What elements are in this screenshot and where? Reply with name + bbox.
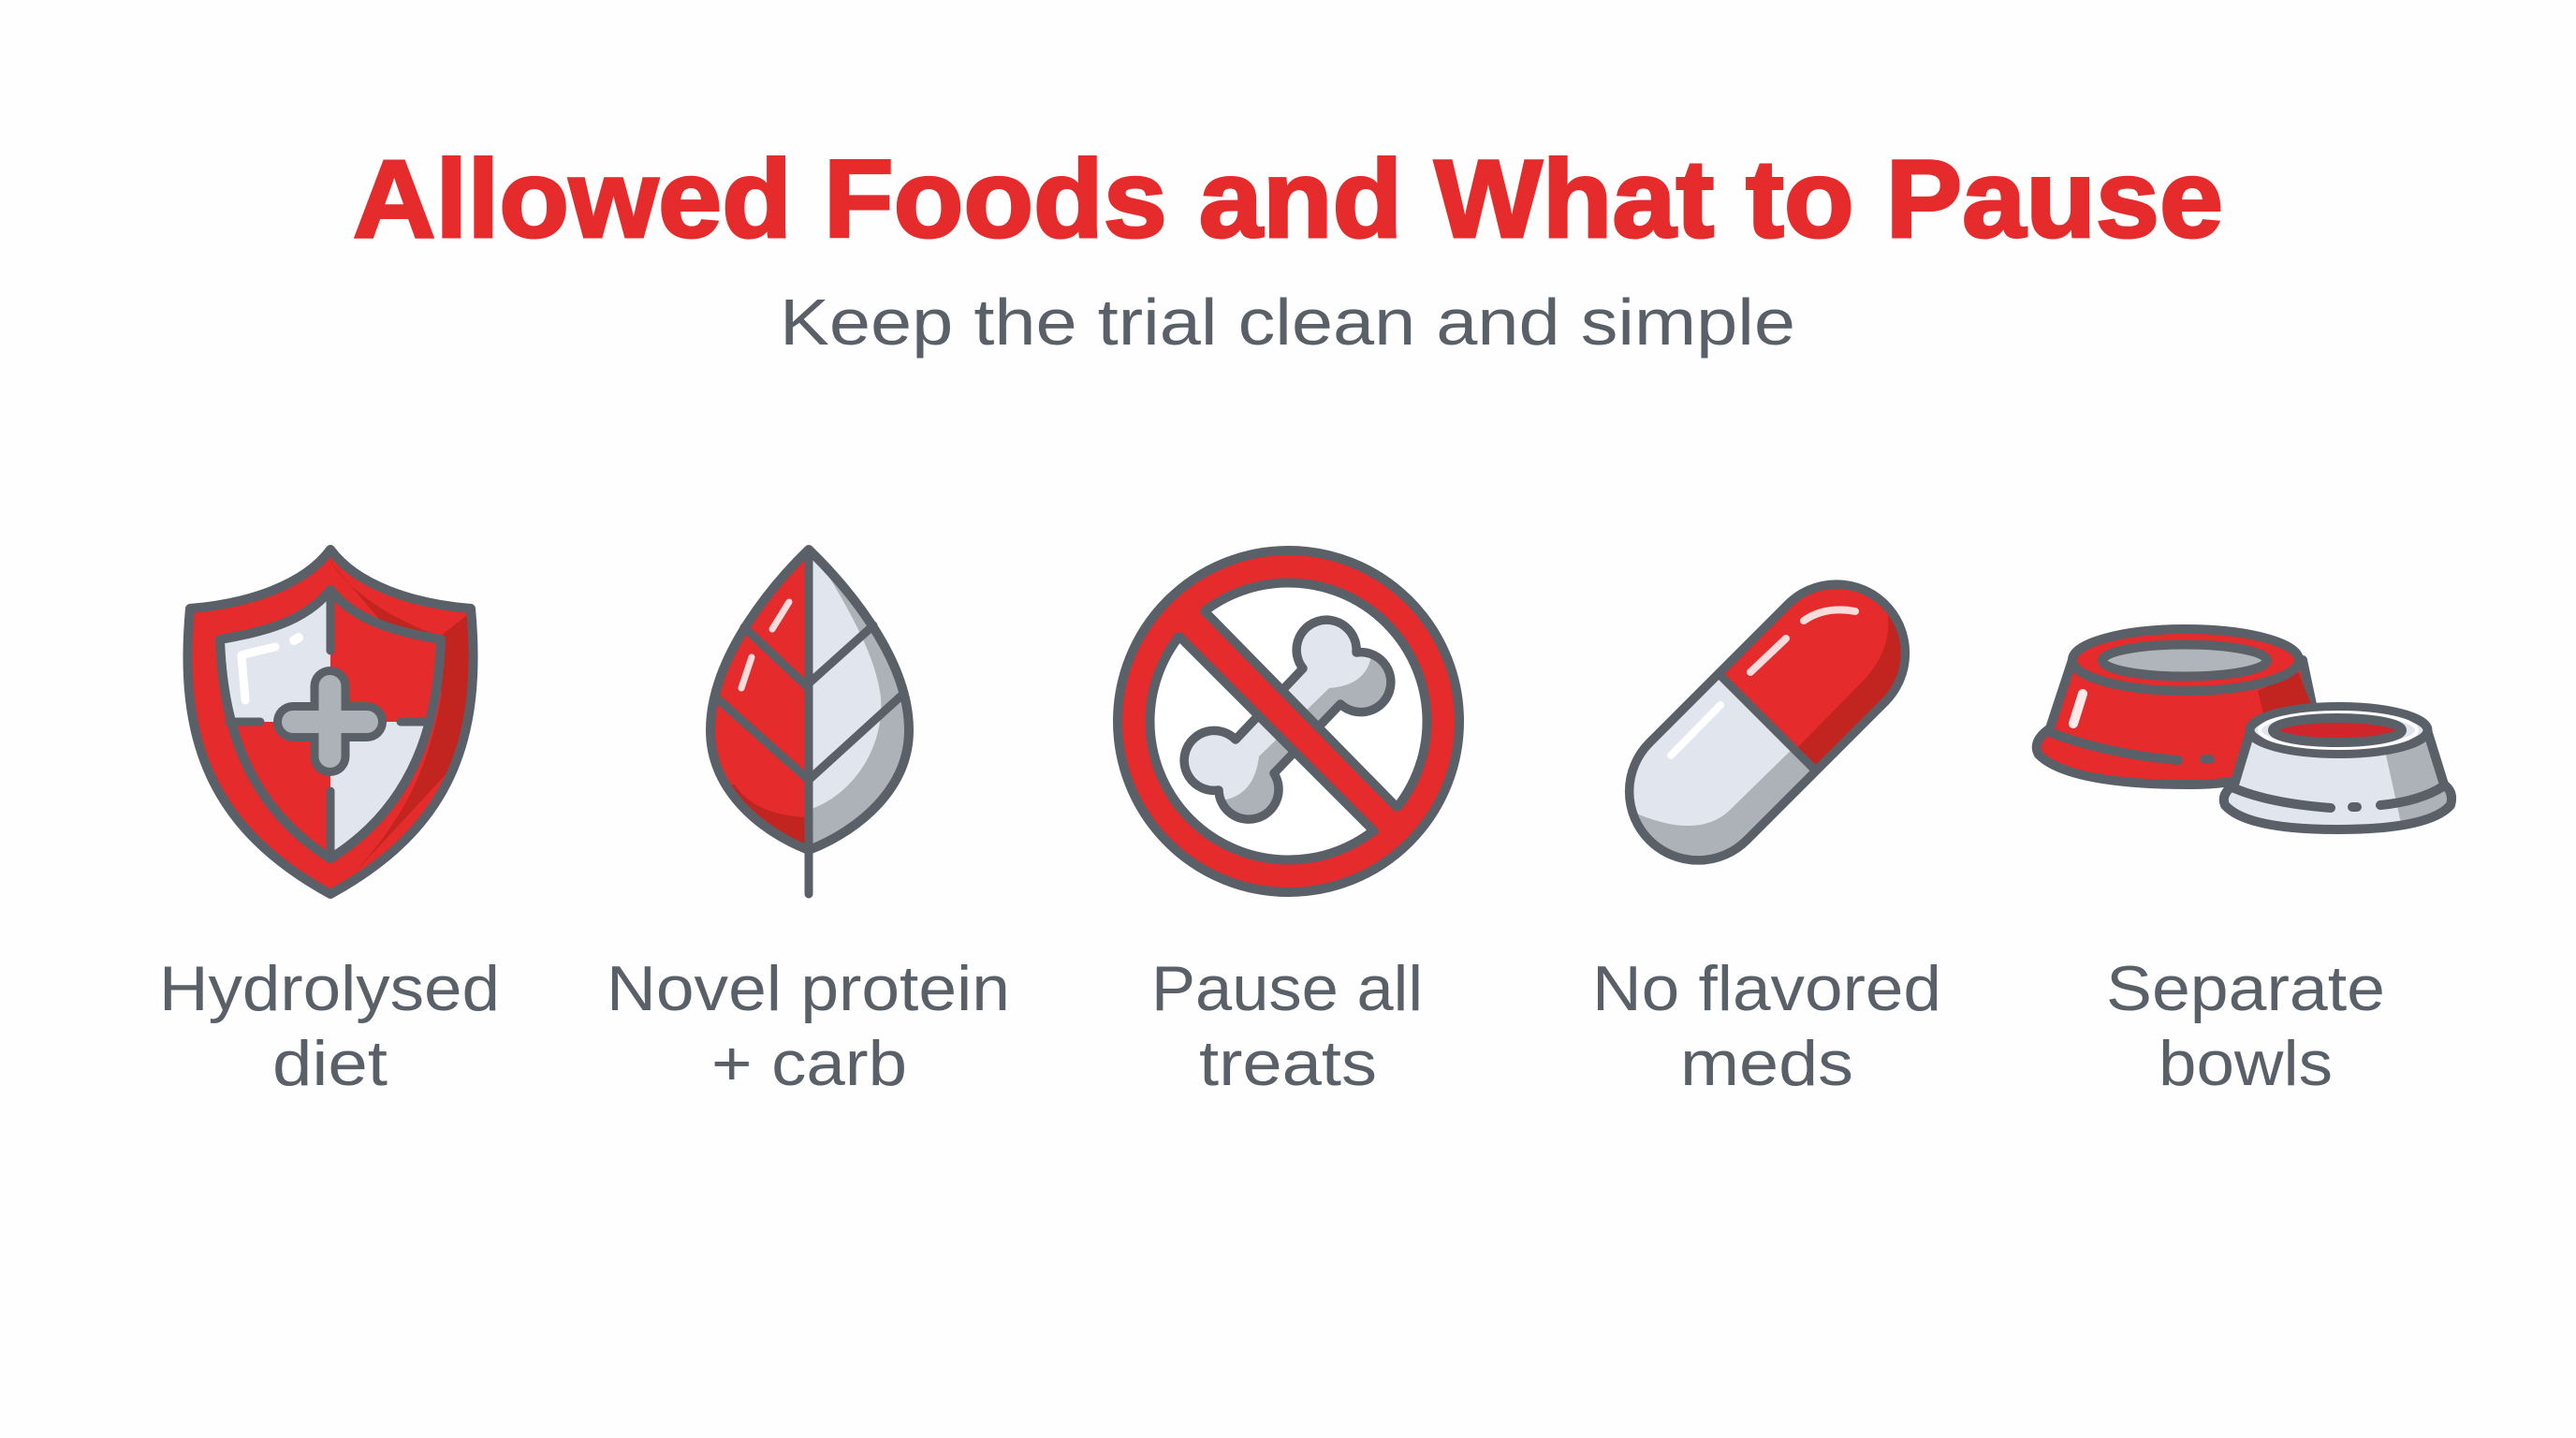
title: Allowed Foods and What to Pause bbox=[353, 138, 2223, 261]
icon: shield with cross bbox=[178, 543, 487, 899]
label: novel protein + carb: + carb bbox=[711, 1028, 907, 1099]
label: hydrolysed diet: Hydrolysed bbox=[159, 953, 500, 1024]
label: separate bowls: Separate bbox=[2106, 953, 2385, 1024]
label: pause all treats: treats bbox=[1199, 1028, 1377, 1099]
icon: two bowls bbox=[2037, 629, 2466, 833]
label: pause all treats bbox=[1151, 953, 1423, 1099]
small grey bowl bbox=[2214, 707, 2466, 833]
panel: no flavored meds bbox=[1598, 580, 1938, 1086]
label: hydrolysed diet bbox=[159, 953, 500, 1099]
label: separate bowls: bowls bbox=[2159, 1028, 2333, 1099]
label: novel protein + carb: Novel protein bbox=[607, 953, 1010, 1024]
label: no flavored meds: meds bbox=[1680, 1028, 1853, 1099]
panel: novel protein + carb bbox=[607, 543, 1010, 1099]
large red bowl bbox=[2037, 629, 2321, 785]
label: no flavored meds: No flavored bbox=[1592, 953, 1941, 1024]
label: separate bowls bbox=[2106, 953, 2385, 1099]
subtitle: Keep the trial clean and simple bbox=[780, 286, 1795, 359]
label: hydrolysed diet: diet bbox=[272, 1028, 388, 1099]
icon: leaf bbox=[702, 543, 927, 894]
panel: separate bowls bbox=[2037, 629, 2466, 1099]
label: pause all treats: Pause all bbox=[1151, 953, 1423, 1024]
icon: capsule bbox=[1625, 580, 1910, 865]
icon: prohibited bone bbox=[1118, 550, 1459, 892]
panel: hydrolysed diet bbox=[159, 543, 500, 1099]
panel: pause all treats bbox=[1118, 550, 1459, 1099]
label: no flavored meds bbox=[1592, 953, 1941, 1099]
label: novel protein + carb bbox=[607, 953, 1010, 1099]
